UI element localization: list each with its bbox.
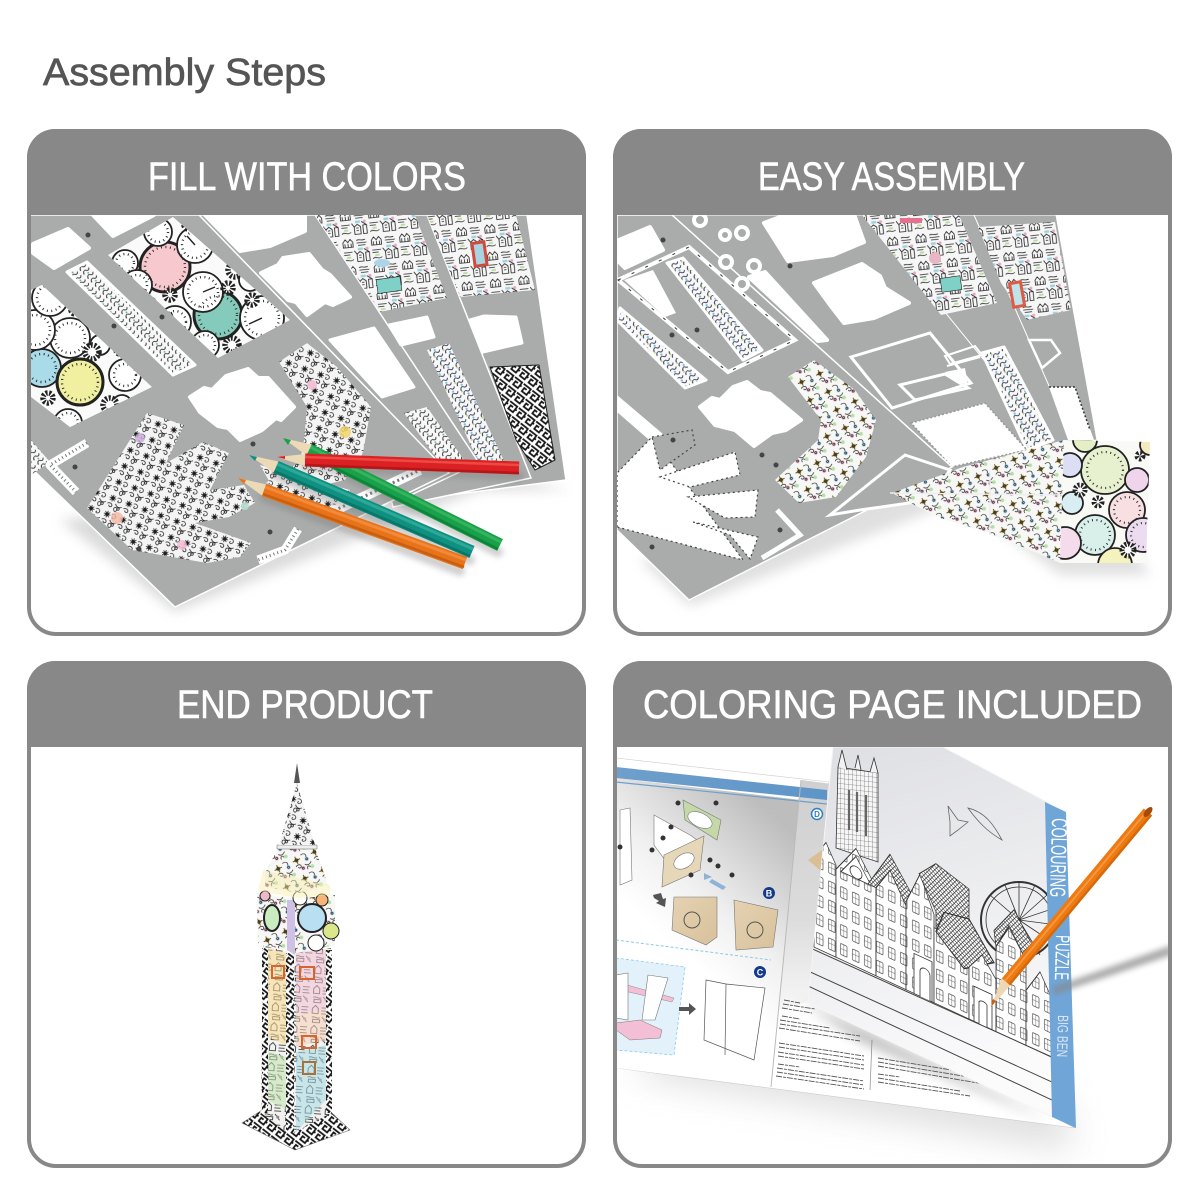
- panel: coloring page included: [613, 661, 1172, 1166]
- sheet stack: back sheets: [199, 215, 566, 507]
- pencil shadow: [1053, 945, 1172, 995]
- orange pencil: [991, 805, 1154, 1007]
- pencil shadows: [264, 456, 519, 571]
- spine text: puzzle: PUZZLE: [1050, 935, 1073, 980]
- assembly diagram: [616, 800, 822, 1060]
- panel: fill with colors: [15, 129, 586, 634]
- clock head: [257, 893, 335, 953]
- white cut-outs: [619, 217, 909, 446]
- heading: fill with colors: FILL WITH COLORS: [148, 155, 466, 199]
- header bar: easy assembly: [613, 129, 1172, 215]
- tower base: [242, 1110, 350, 1150]
- victoria tower: [836, 750, 878, 862]
- decorated strip: [67, 262, 195, 375]
- instruction booklet page: [616, 758, 1075, 1128]
- clock piece pink and teal: [108, 217, 290, 358]
- heading: easy assembly: EASY ASSEMBLY: [758, 155, 1025, 199]
- flower piece right: [265, 343, 371, 490]
- corner cut-out: [762, 510, 800, 558]
- header bar: fill with colors: [27, 129, 586, 215]
- colored flower piece: [775, 360, 876, 503]
- heading: coloring page included: COLORING PAGE INCLUDED: [643, 683, 1142, 727]
- ring cut-outs: [694, 214, 760, 290]
- header bar: coloring page included: [613, 661, 1172, 747]
- assembled clock and flower strip: [824, 440, 1150, 563]
- white cut-outs: [33, 215, 350, 440]
- tower edge strips: [262, 948, 332, 1135]
- registration dots: [650, 238, 792, 550]
- ferris wheel: [981, 882, 1057, 958]
- step label C: C: [757, 968, 764, 978]
- coloring page: [808, 747, 1052, 1117]
- panel border: [29, 131, 584, 634]
- booklet text lines: [776, 1000, 990, 1096]
- blue band: [616, 767, 827, 800]
- pencil: red: [277, 454, 519, 473]
- shadow under coloring page: [809, 1004, 1030, 1113]
- back sheets: [672, 215, 1097, 480]
- flower accents: [111, 380, 351, 550]
- blue spine: [1045, 802, 1076, 1128]
- line-art cityscape: [808, 750, 1057, 1100]
- map illustration sheet pieces: [315, 215, 555, 470]
- step label D: D: [814, 810, 820, 819]
- cut-out frame: [617, 247, 795, 445]
- map sheet pieces: [851, 215, 1094, 467]
- spine text: colouring: COLOURING: [1045, 818, 1072, 897]
- fan cut-outs: [617, 430, 758, 560]
- pencil: teal: [249, 455, 473, 556]
- ground lines: [808, 947, 1052, 1100]
- terraced houses: [814, 807, 1054, 1058]
- roof and spire: [265, 848, 328, 893]
- registration dots: [72, 232, 272, 552]
- coloured panels: [264, 948, 326, 1132]
- tower shaft: [261, 945, 290, 1135]
- pencil: orange: [238, 478, 466, 567]
- heading: end product: END PRODUCT: [177, 683, 433, 727]
- spine text: big ben: BIG BEN: [1053, 1015, 1071, 1057]
- step label B: B: [766, 888, 773, 898]
- panel: end product: [27, 661, 586, 1166]
- illustration: coloured Big Ben tower: [242, 763, 350, 1150]
- fold line: [771, 780, 801, 1087]
- small corner pieces: [50, 443, 420, 560]
- title: Assembly Steps: [43, 52, 326, 94]
- panel border: [29, 663, 584, 1166]
- front sheet: [30, 215, 449, 607]
- pencil: green: [283, 438, 501, 549]
- header bar: end product: [27, 661, 586, 747]
- birds: [948, 806, 1002, 840]
- flower fan piece: [87, 413, 255, 563]
- panel: easy assembly: [613, 129, 1172, 634]
- front sheet: [617, 215, 952, 600]
- clock piece blue and yellow: [31, 285, 152, 427]
- panel border: [615, 131, 1170, 634]
- panel border: [615, 663, 1170, 1166]
